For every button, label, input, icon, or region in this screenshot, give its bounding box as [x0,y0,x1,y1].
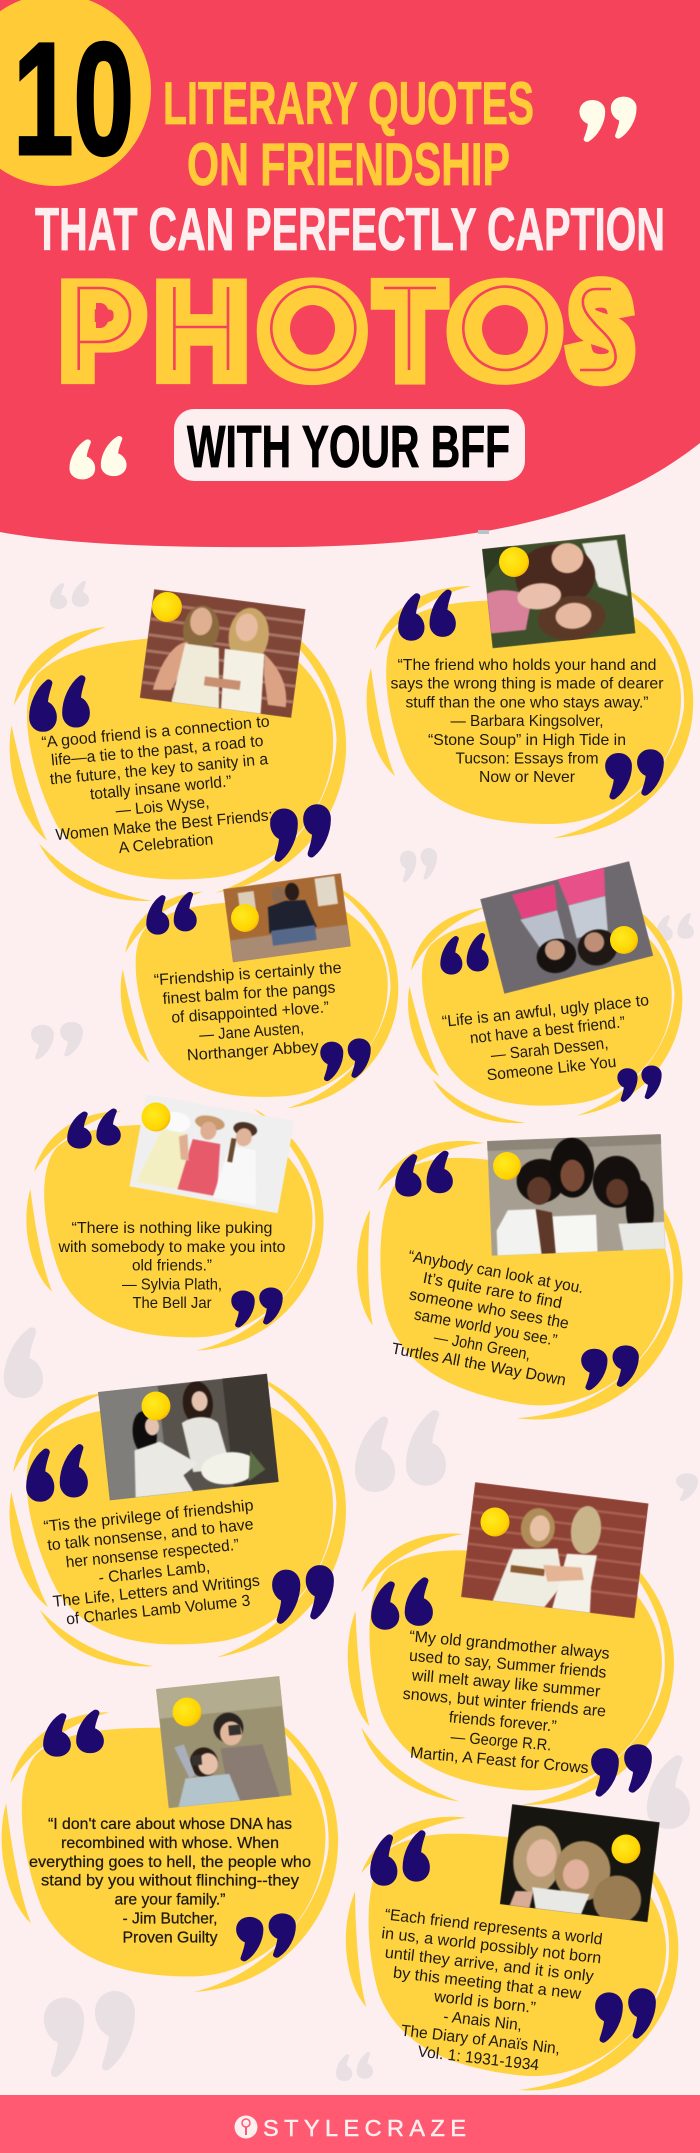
quote text: — George R.R. [450,1729,552,1755]
quote text: someone who sees the [408,1286,570,1333]
speech blob [26,1108,324,1351]
quote text: in us, a world possibly not born [381,1925,602,1967]
quote text [390,1248,585,1390]
quote text: Northanger Abbey [186,1039,319,1064]
quote text: will melt away like summer [410,1667,602,1701]
decorative grey quote marks [4,581,698,2081]
quote text: “I don't care about whose DNA has [48,1816,292,1833]
photo: two friends lying on asphalt [480,861,653,994]
photo: three friends laughing [129,1094,295,1213]
speech blob [0,603,359,913]
quote text: — Jane Austen, [199,1020,304,1044]
quote text: “Friendship is certainly the [153,960,342,989]
quote text: A Celebration [118,831,214,857]
pin [142,1392,170,1420]
quote text: “Anybody can look at you. [407,1248,585,1297]
pin [493,1152,521,1180]
quote text: recombined with whose. When [61,1835,279,1852]
heading: PHOTOS: S [569,259,632,405]
quote text: old friends.” [132,1258,212,1274]
quote text: by this meeting that a new [392,1965,582,2003]
quote text: — Sylvia Plath, [122,1276,222,1293]
quote text: of disappointed +love.” [171,999,330,1027]
quote text: — Sarah Dessen, [490,1035,609,1065]
icon: opening quote [147,893,196,934]
quote text: “Tis the privilege of friendship [43,1497,254,1536]
quote text: are your family.” [114,1892,226,1909]
quote text: until they arrive, and it is only [384,1945,594,1986]
icon: closing quote [273,1566,333,1623]
quote text [441,992,656,1088]
quote text: Proven Guilty [122,1929,218,1946]
speech blob [114,876,406,1119]
footer [0,2095,700,2153]
quote text: not have a best friend.” [469,1014,626,1047]
icon: closing quote [237,1914,295,1961]
quote text: Women Make the Best Friends; [55,807,274,844]
quote text: Vol. 1: 1931-1934 [417,2043,540,2074]
icon: opening quote [441,934,488,974]
quote text [368,1906,604,2080]
heading: PHOTOS: H [156,259,247,404]
quote text: Now or Never [479,769,576,786]
icon: opening quote [68,1109,120,1148]
quote text: The Life, Letters and Writings [52,1573,261,1611]
quote text: - Charles Lamb, [98,1559,211,1587]
quote text: used to say, Summer friends [408,1648,607,1682]
quote text [153,960,347,1066]
photo: three friends lying on grass [482,534,636,648]
quote text: friends forever.” [448,1709,557,1736]
quote text: life—a tie to the past, a road to [50,733,264,769]
icon: closing quote [618,1066,661,1101]
quote text [29,1816,311,1946]
quote text: finest balm for the pangs [162,980,336,1008]
quote text: It’s quite rare to find [422,1270,563,1312]
photo: two friends on a step [223,873,351,962]
quote text [58,1220,286,1312]
speech blob [398,885,694,1134]
quote text: Martin, A Feast for Crows [409,1745,589,1777]
badge: number 10 [0,0,151,188]
quote text: The Diary of Anaïs Nin, [400,2023,561,2058]
quote text: stand by you without flinching--they [41,1873,299,1890]
icon: closing quote [592,1745,651,1796]
quote text: — Lois Wyse, [115,794,210,820]
icon: header closing quote [580,97,636,142]
panel: quote 10 Anais Nin [330,1802,692,2106]
icon: closing quote [321,1039,370,1080]
icon: opening quote [30,676,89,731]
speech blob [330,1802,692,2106]
panel: quote 2 Barbara Kingsolver [367,534,693,838]
quote text: - Anais Nin, [442,2008,523,2034]
subtitle pill: with your BFF [174,409,525,481]
quote text [397,1628,612,1778]
photo: two blonde girls [499,1804,660,1927]
panel: quote 9 Jim Butcher [2,1676,338,1992]
heading: PHOTOS: O [259,259,365,404]
quote text: the future, the key to sanity in a [49,751,269,788]
quote text: The Bell Jar [132,1295,212,1312]
heading: PHOTOS: O [449,260,561,404]
icon: opening quote [44,1710,103,1756]
quote text: her nonsense respected.” [65,1537,240,1572]
icon: header opening quote [70,437,126,479]
pin [231,904,259,932]
quote text: “There is nothing like puking [72,1220,272,1237]
quote text: world is born.” [432,1988,536,2017]
quote text: — Barbara Kingsolver, [450,713,604,730]
photo: three friends together [487,1134,665,1256]
quote text: “Life is an awful, ugly place to [441,992,650,1031]
icon: closing quote [582,1346,638,1390]
quote text [41,713,281,863]
speech blob [2,1709,338,1992]
speech blob [0,1366,361,1679]
heading: PHOTOS: P [61,260,144,405]
photo: two friends at brick wall [140,589,306,718]
panel: quote 8 George R.R. Martin [335,1482,684,1819]
photo: two friends at red brick wall [461,1482,649,1618]
brand name: STYLECRAZE [263,2115,466,2141]
quote text: “Stone Soup” in High Tide in [428,732,626,749]
quote text: Someone Like You [486,1054,617,1084]
quote text [390,657,664,786]
quote text [43,1497,264,1630]
pin [612,1834,640,1864]
speech blob [367,583,693,838]
quote text: same world you see.” [413,1306,558,1350]
pin [480,1508,510,1536]
quote text: says the wrong thing is made of dearer [390,676,664,693]
quote text: everything goes to hell, the people who [29,1854,311,1871]
icon: closing quote [606,750,663,799]
quote text: “The friend who holds your hand and [398,657,656,674]
quote text: of Charles Lamb Volume 3 [65,1593,251,1628]
panel: quote 1 Lois Wyse [0,589,359,913]
title: ON FRIENDSHIP [187,131,510,198]
panel: quote 7 Charles Lamb [0,1366,361,1679]
panel: quote 6 John Green [333,1121,700,1444]
quote text: totally insane world.” [89,773,232,803]
icon: opening quote [399,590,455,640]
quote text: “Each friend represents a world [384,1907,603,1949]
quote text: “A good friend is a connection to [41,713,270,752]
heading: PHOTOS [61,259,632,405]
photo: two friends with cameras [156,1676,292,1808]
icon: opening quote [27,1445,87,1501]
quote text: Tucson: Essays from [456,750,598,768]
pin [610,926,638,954]
quote text: to talk nonsense, and to have [47,1516,254,1554]
icon: opening quote [371,1831,429,1885]
panel: quote 4 Sarah Dessen [398,861,694,1134]
quote text: - Jim Butcher, [122,1910,218,1928]
title [35,70,665,263]
header band [0,0,700,547]
quote text: with somebody to make you into [58,1239,286,1256]
quote text: “My old grandmother always [409,1628,610,1663]
pin [499,547,529,577]
quote text: — John Green, [432,1329,532,1364]
quote text: stuff than the one who stays away.” [406,694,648,711]
photo: two friends with flowers [98,1374,279,1500]
panel: quote 5 Sylvia Plath [26,1094,324,1351]
speech blob [333,1121,700,1444]
quote text: snows, but winter friends are [402,1686,607,1721]
panel: quote 3 Jane Austen [114,873,406,1119]
icon: logo [234,2116,258,2138]
pin [152,592,182,622]
heading: PHOTOS: T [377,259,444,404]
pin [172,1698,202,1726]
icon: closing quote [596,1989,655,2042]
icon: opening quote [396,1151,452,1196]
icon: closing quote [232,1288,282,1327]
icon: opening quote [372,1578,432,1629]
speech blob [335,1522,684,1819]
badge: number 10: 10 [13,9,134,188]
subtitle pill: with your BFF: WITH YOUR BFF [187,414,510,480]
icon: closing quote [271,805,330,861]
quote text: Turtles All the Way Down [390,1341,567,1389]
pin [142,1102,170,1132]
